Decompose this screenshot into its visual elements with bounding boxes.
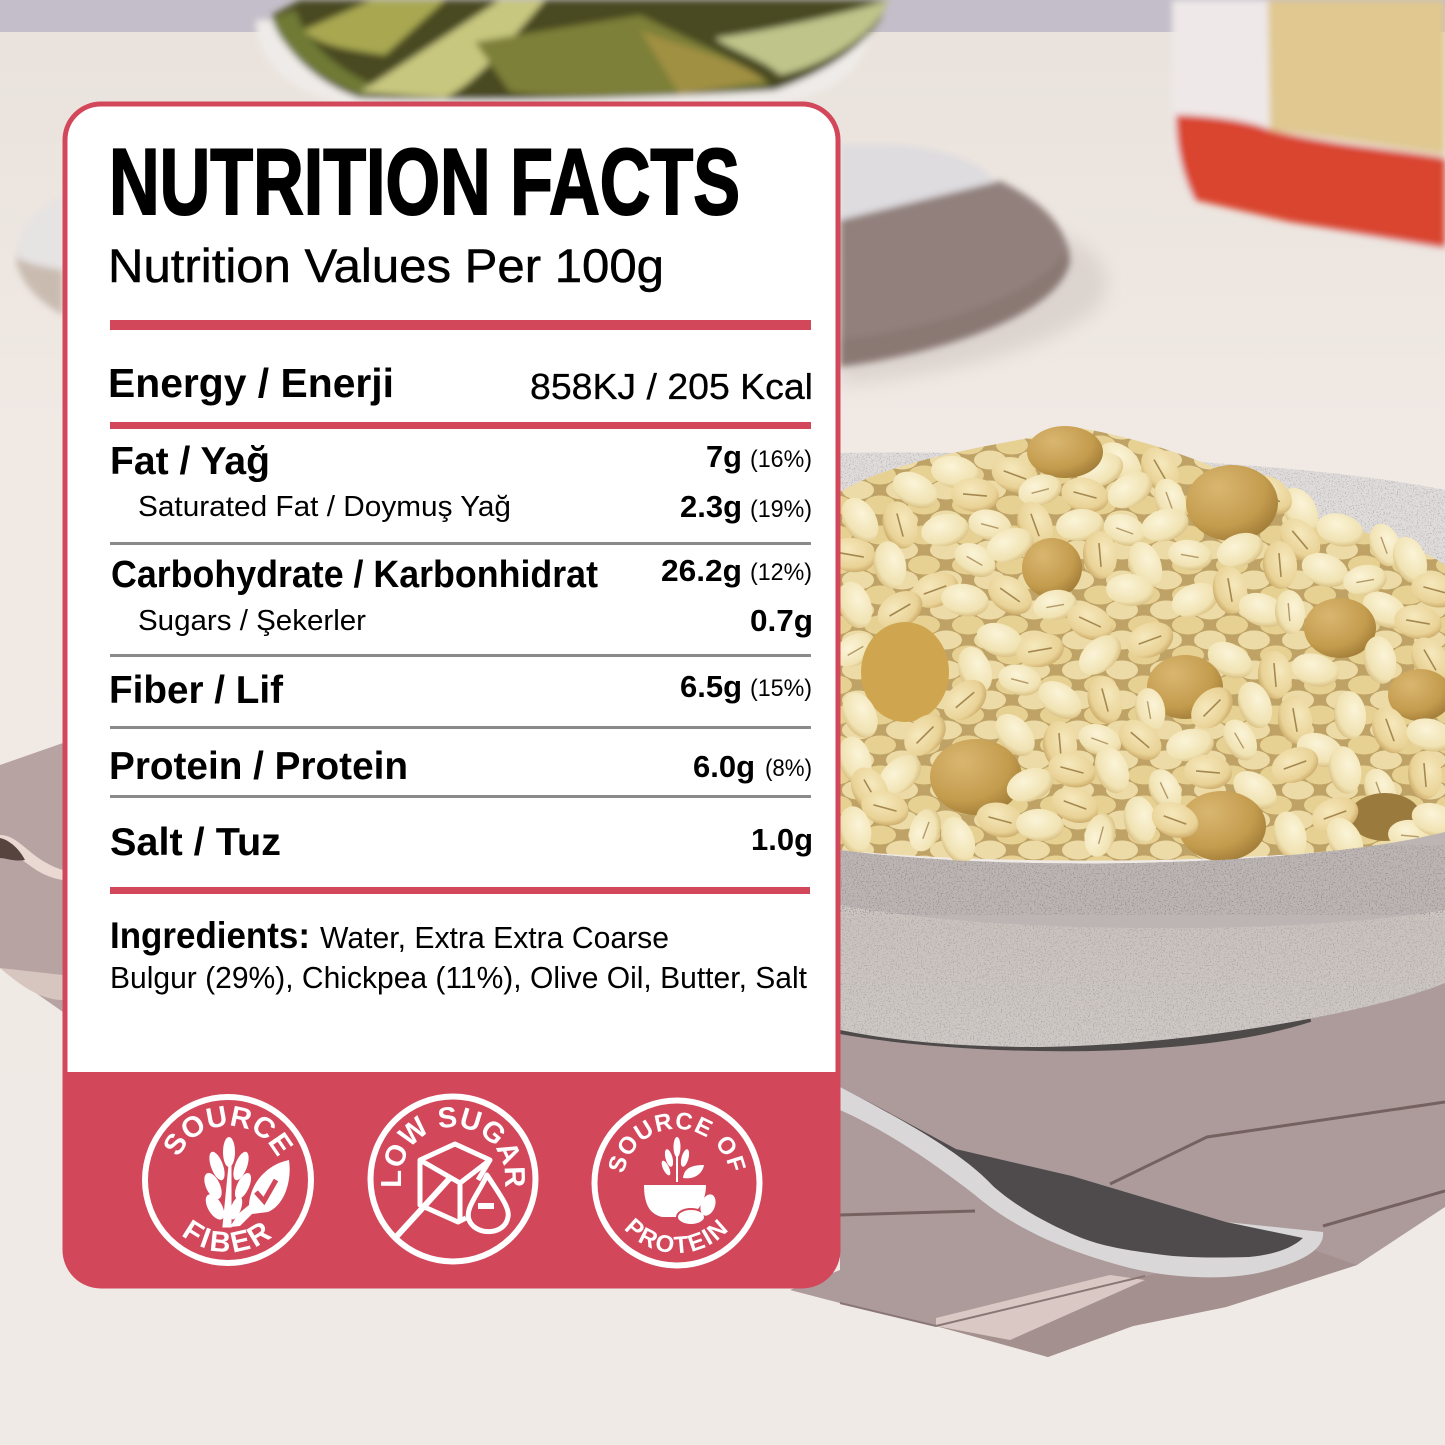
- background: small white plate: [17, 197, 63, 315]
- row: fat: Fat / Yağ: [110, 440, 270, 483]
- background: left napkin: [0, 743, 63, 1012]
- row: fiber: [109, 669, 812, 712]
- ingredients text: Ingredients:: [110, 915, 310, 956]
- background: red product package: [1172, 0, 1445, 250]
- background: knife: [840, 1087, 1323, 1277]
- badge: low sugar: LOW SUGAR: [381, 1107, 525, 1188]
- row: salt: Salt / Tuz: [110, 821, 281, 864]
- badge band: [63, 1072, 840, 1288]
- panel background: [65, 104, 838, 1286]
- row: energy: Energy / Enerji: [108, 360, 394, 406]
- row: carbohydrate: (12%): [750, 559, 812, 586]
- row: saturated fat: 2.3g: [680, 489, 742, 524]
- row: saturated fat: (19%): [750, 496, 812, 523]
- row: fiber: 6.5g: [680, 669, 742, 704]
- background: napkin under bowl: [790, 983, 1445, 1357]
- badge: source of protein: PROTEIN: [624, 1218, 728, 1253]
- background: trivet shadow: [840, 235, 1107, 385]
- row: carbohydrate: Carbohydrate / Karbonhidrat: [111, 554, 598, 596]
- row: protein: (8%): [765, 755, 812, 782]
- row: sugars: Sugars / Şekerler: [138, 605, 366, 637]
- icon: sugar cube with drop: [397, 1144, 508, 1236]
- row: saturated fat: Saturated Fat / Doymuş Yağ: [138, 491, 511, 523]
- row: fat: [110, 439, 812, 483]
- title: NUTRITION FACTS: [109, 129, 740, 234]
- row: fat: 7g: [706, 439, 742, 474]
- background: wooden trivet: [840, 145, 1070, 367]
- row: salt: 1.0g: [751, 822, 813, 857]
- row: protein: Protein / Protein: [109, 745, 408, 788]
- row: carbohydrate: 26.2g: [661, 553, 742, 588]
- background: speckled bowl: [840, 450, 1445, 1060]
- icon: bowl with sprout and beans: [644, 1137, 718, 1225]
- row: energy: [108, 360, 813, 407]
- icon: wheat and leaf: [201, 1137, 290, 1227]
- row: energy: 858KJ / 205 Kcal: [530, 366, 813, 407]
- ingredients text: Bulgur (29%), Chickpea (11%), Olive Oil, Butter, Salt: [110, 960, 807, 995]
- ingredients text: [110, 915, 807, 995]
- badge: source of protein: SOURCE OF: [609, 1112, 746, 1172]
- row: saturated fat: [138, 489, 812, 524]
- bowl front rim: [840, 832, 1445, 928]
- panel: nutrition facts: [62, 102, 840, 1288]
- background: wall strip: [0, 0, 1445, 32]
- divider: [110, 320, 811, 330]
- row: protein: [109, 745, 812, 788]
- row: salt: [110, 821, 813, 864]
- row: fiber: (15%): [750, 675, 812, 702]
- background: barley grains and chickpeas: [825, 426, 1445, 869]
- row: fiber: Fiber / Lif: [109, 669, 284, 712]
- badge: source fiber: [142, 1094, 314, 1266]
- badge: source fiber: FIBER: [182, 1220, 272, 1252]
- row: sugars: [138, 603, 813, 638]
- background: grain pile base: [840, 428, 1445, 861]
- badge: source fiber: SOURCE: [164, 1106, 294, 1156]
- badge: source of protein: [592, 1098, 762, 1268]
- badge: low sugar: [368, 1094, 538, 1264]
- background: pickle bowl: [256, 0, 888, 106]
- row: sugars: 0.7g: [750, 603, 813, 638]
- row: fat: (16%): [750, 446, 812, 473]
- row: protein: 6.0g: [693, 749, 755, 784]
- ingredients text: Water, Extra Extra Coarse: [320, 920, 669, 955]
- subtitle: Nutrition Values Per 100g: [108, 239, 664, 292]
